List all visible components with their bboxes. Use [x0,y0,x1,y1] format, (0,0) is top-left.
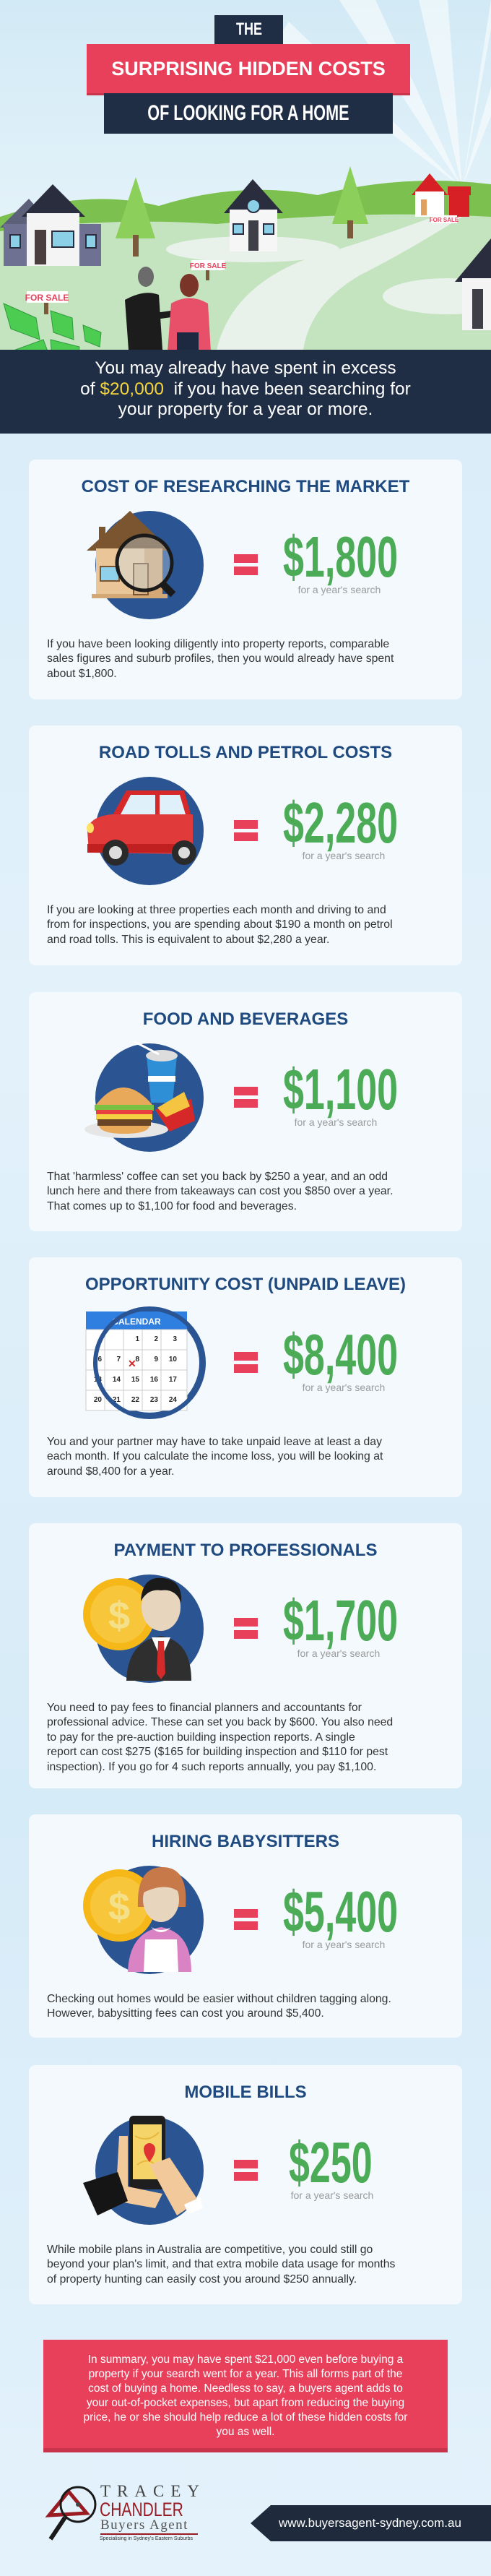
icon: calendar: 22 [131,1396,139,1404]
summary box: your out-of-pocket expenses, but apart from reducing the buying [87,2397,404,2409]
icon: calendar: 15 [131,1376,139,1384]
body text: and road tolls. This is equivalent to about $2,280 a year. [47,934,329,946]
icon: coin and babysitter [83,1866,204,1974]
summary box: you as well. [217,2426,274,2438]
icon: burger and drink [84,1041,204,1152]
body text: That comes up to $1,100 for food and beverages. [47,1200,297,1212]
body text: You and your partner may have to take unpaid leave at least a day [47,1436,382,1448]
amount: $250 [289,2130,373,2194]
amount: $8,400 [283,1322,398,1387]
equals [234,1618,258,1639]
icon: house with magnifier [87,511,204,619]
money [4,303,202,394]
body text: each month. If you calculate the income loss, you will be looking at [47,1450,383,1463]
summary box: property if your search went for a year. This all forms part of the [89,2368,402,2380]
icon: coin and babysitter: $ [108,1885,130,1929]
sub label: for a year's search [303,850,385,861]
body text: That 'harmless' coffee can set you back by $250 a year, and an odd [47,1171,388,1183]
body text: about $1,800. [47,668,117,680]
icon: calendar: 14 [113,1376,121,1384]
body text [47,904,393,946]
icon: magnifier house [45,2486,97,2541]
heading: MOBILE BILLS [184,2082,307,2102]
panel: payment to professionals [29,1523,462,1788]
body text: to pay for the pre-auction building inspection reports. A single [47,1731,355,1744]
heading: HIRING BABYSITTERS [152,1832,339,1851]
for sale signs: FOR SALE [430,217,459,223]
sub label: for a year's search [298,584,381,595]
panel: mobile bills [29,2065,462,2304]
heading: OPPORTUNITY COST (UNPAID LEAVE) [85,1275,406,1294]
website banner: www.buyersagent-sydney.com.au [279,2516,461,2530]
trees [116,166,368,257]
icon: calendar: 23 [150,1396,158,1404]
body text: However, babysitting fees can cost you around $5,400. [47,2007,324,2020]
icon: calendar: 24 [169,1396,177,1404]
for sale signs: FOR SALE [25,293,69,303]
summary box [43,2340,448,2452]
house middle [224,179,283,251]
body text: of property hunting can easily cost you around $250 annually. [47,2273,357,2286]
icon: calendar: 21 [113,1396,121,1404]
equals [234,1909,258,1930]
intro band [0,350,491,434]
icon: calendar: ✕ [128,1358,136,1369]
icon: coin and businessman: $ [108,1594,130,1637]
icon: calendar: 9 [154,1356,158,1364]
equals [234,2160,258,2181]
logo [45,2482,206,2541]
icon: hand with phone [83,2116,204,2225]
body text: While mobile plans in Australia are competitive, you could still go [47,2244,373,2256]
icon: calendar: 3 [173,1335,177,1343]
sub label: for a year's search [295,1116,377,1128]
icon: calendar: 20 [94,1396,102,1404]
icon: calendar: CALENDAR [112,1317,161,1327]
body text: around $8,400 for a year. [47,1465,175,1478]
body text: Checking out homes would be easier without children tagging along. [47,1993,391,2005]
intro band: of $20,000 if you have been searching for [80,379,411,399]
title: of looking for a home [104,93,393,134]
body text: beyond your plan's limit, and that extra mobile data usage for months [47,2258,395,2270]
body text: lunch here and there from takeaways can cost you $850 over a year. [47,1185,393,1197]
heading: FOOD AND BEVERAGES [143,1009,348,1029]
sub label: for a year's search [291,2189,373,2201]
icon: calendar: 16 [150,1376,158,1384]
body text: sales figures and suburb profiles, then you would already have spent [47,652,394,665]
body text [47,1436,383,1478]
equals [234,554,258,575]
heading: ROAD TOLLS AND PETROL COSTS [99,743,392,762]
for sale signs [25,215,491,366]
couple [125,267,211,352]
title: surprising hidden costs [87,44,410,93]
title: surprising hidden costs: SURPRISING HIDDEN COSTS [111,58,386,79]
icon: calendar: 2 [154,1335,158,1343]
logo text [100,2482,206,2541]
amount: $1,700 [283,1588,398,1653]
header scene [0,0,491,350]
summary box: price, he or she should help reduce a lot of these hidden costs for [84,2411,407,2424]
icon: calendar: 8 [135,1356,139,1364]
panel: opportunity cost [29,1257,462,1497]
icon: calendar: 10 [169,1356,177,1364]
house left [0,184,101,266]
icon: calendar: 13 [94,1376,102,1384]
logo text: Buyers Agent [100,2517,188,2533]
equals [234,1352,258,1373]
body text [47,638,394,680]
sub label: for a year's search [303,1382,385,1393]
heading: COST OF RESEARCHING THE MARKET [82,477,409,496]
amount: $1,800 [283,525,398,589]
panel: food and beverages [29,992,462,1231]
panel: road tolls and petrol [29,725,462,965]
logo text: CHANDLER [100,2499,183,2520]
amount: $1,100 [283,1057,398,1121]
body text: from for inspections, you are spending about $190 a month on petrol [47,918,393,931]
intro band: your property for a year or more. [118,400,373,419]
equals [234,1087,258,1108]
panel: hiring babysitters [29,1814,462,2038]
logo text: Specialising in Sydney's Eastern Suburbs [100,2536,193,2541]
summary box: cost of buying a home. Needless to say, a buyers agent adds to [88,2382,403,2395]
body text: You need to pay fees to financial planners and accountants for [47,1702,362,1714]
amount: $5,400 [283,1879,398,1944]
icon: calendar: 1 [135,1335,139,1343]
house red [412,173,471,217]
body text: inspection). If you go for 4 such reports annually, you pay $1,100. [47,1761,376,1773]
body text: professional advice. These can set you back by $600. You also need [47,1716,393,1728]
house right [455,238,491,330]
body text [47,1702,393,1773]
amount: $2,280 [283,791,398,855]
body text: If you have been looking diligently into property reports, comparable [47,638,389,650]
body text [47,2244,395,2286]
icon: calendar: 7 [116,1356,121,1364]
icon: coin and businessman [83,1575,204,1683]
sub label: for a year's search [297,1647,380,1659]
intro band: You may already have spent in excess [95,358,396,378]
title: THE: THE [235,20,261,39]
body text [47,1171,393,1212]
for sale signs: FOR SALE [190,262,227,270]
logo text: TRACEY [100,2482,206,2500]
body text: report can cost $275 ($165 for building inspection and $110 for pest [47,1746,388,1758]
title: THE [214,15,283,44]
icon: calendar [85,1306,206,1419]
title: of looking for a home: OF LOOKING FOR A HOME [147,101,349,125]
body text: If you are looking at three properties each month and driving to and [47,904,386,916]
panel: researching the market [29,460,462,699]
sub label: for a year's search [303,1939,385,1950]
summary box: In summary, you may have spent $21,000 even before buying a [88,2353,403,2366]
icon: calendar: 6 [97,1356,102,1364]
website banner [251,2505,491,2541]
heading: PAYMENT TO PROFESSIONALS [114,1541,377,1560]
icon: calendar: 17 [169,1376,177,1384]
icon: red car [87,777,204,885]
body text [47,1993,391,2020]
equals [234,820,258,841]
